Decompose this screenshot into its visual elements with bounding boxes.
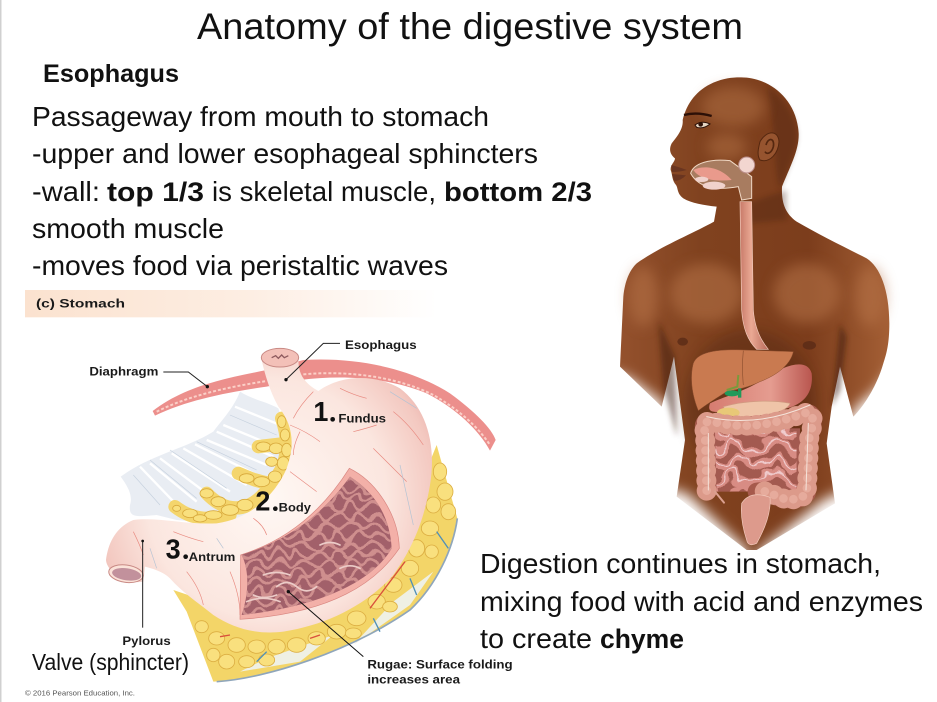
label: 3 antrum: 3: [166, 533, 181, 564]
pancreas and duodenum: [717, 401, 790, 418]
label: 2 body: 2: [255, 485, 270, 516]
line: peristaltic waves: -moves food via peristaltic waves: [32, 250, 448, 281]
highlights on chest and shoulders: [628, 263, 885, 327]
diaphragm pointer and label: Diaphragm: [89, 364, 158, 378]
line: create chyme: to create: [480, 623, 592, 654]
rugae pointer: [287, 590, 363, 657]
esophagus pointer and label: [284, 338, 417, 381]
label: 1 fundus: 1: [313, 396, 328, 427]
line: sphincters: -upper and lower esophageal sphincters: [32, 138, 538, 169]
small intestine: [714, 428, 800, 492]
diaphragm pointer and label: [89, 364, 209, 388]
title: Anatomy of the digestive system: [197, 6, 743, 47]
label: 1 fundus: Fundus: [338, 411, 386, 425]
large intestine: [704, 405, 813, 503]
label: 3 antrum: [166, 533, 235, 564]
gallbladder and ducts: [725, 375, 741, 398]
line: wall composition: [32, 176, 592, 207]
pylorus pointer and label: Pylorus: [122, 634, 171, 648]
diaphragm band: [153, 359, 496, 451]
forehead and cheek highlight: [702, 87, 765, 160]
line: passageway: Passageway from mouth to stomach: [32, 101, 489, 132]
neck and torso shading: [658, 190, 847, 477]
slide edge line: [0, 0, 2, 702]
fat along lesser curvature: [173, 416, 292, 522]
line: wall composition: bottom 2/3: [444, 177, 592, 207]
text block: digestion in stomach: [480, 548, 923, 654]
mouth cross-section: [691, 157, 755, 200]
line: wall composition: top 1/3: [107, 177, 204, 207]
label: rugae: increases area: [367, 672, 460, 686]
greater omentum: [121, 392, 293, 525]
cut-away opening with rugae: [240, 468, 400, 620]
label: 3 antrum: Antrum: [189, 550, 235, 564]
label: rugae: [367, 657, 513, 686]
fat and outer wall of greater curvature: [173, 445, 457, 682]
nipples: [677, 338, 688, 346]
stomach heading band: [25, 290, 437, 317]
line: digestion continues: Digestion continues in stomach,: [480, 548, 881, 579]
label: rugae: Rugae: Surface folding: [367, 657, 513, 671]
text block: esophagus description: [32, 60, 592, 281]
rectum: [741, 495, 770, 545]
line: mixing food: mixing food with acid and enzymes: [480, 586, 923, 617]
heading: esophagus: Esophagus: [43, 60, 179, 88]
pylorus pointer and label: [122, 540, 171, 648]
line: wall composition: -wall:: [32, 176, 100, 207]
stomach body: [106, 348, 432, 633]
line: create chyme: [480, 623, 684, 654]
stomach heading band: (c) Stomach: [36, 297, 125, 311]
lips: [671, 165, 687, 181]
ear: [758, 133, 779, 161]
liver: [692, 350, 793, 411]
skin body: [620, 77, 889, 550]
label: 1 fundus: [313, 396, 386, 427]
stomach: [709, 364, 812, 412]
figure: human torso with digestive tract: [610, 77, 897, 570]
back of head shadow: [767, 87, 797, 190]
fade mask: arms and pelvis: [610, 363, 897, 570]
panel: stomach illustration: [25, 290, 513, 698]
rugae folds: [242, 477, 392, 614]
copyright: © 2016 Pearson Education, Inc.: [25, 689, 135, 698]
line: wall composition: is skeletal muscle,: [212, 176, 436, 207]
line: smooth muscle: smooth muscle: [32, 213, 224, 244]
esophagus: [740, 202, 768, 349]
label: valve (sphincter): Valve (sphincter): [32, 649, 189, 675]
label: 2 body: [255, 485, 311, 516]
eye and brow: [684, 114, 712, 116]
label: 2 body: Body: [279, 501, 311, 515]
esophagus pointer and label: Esophagus: [345, 338, 417, 352]
line: create chyme: chyme: [600, 624, 684, 654]
